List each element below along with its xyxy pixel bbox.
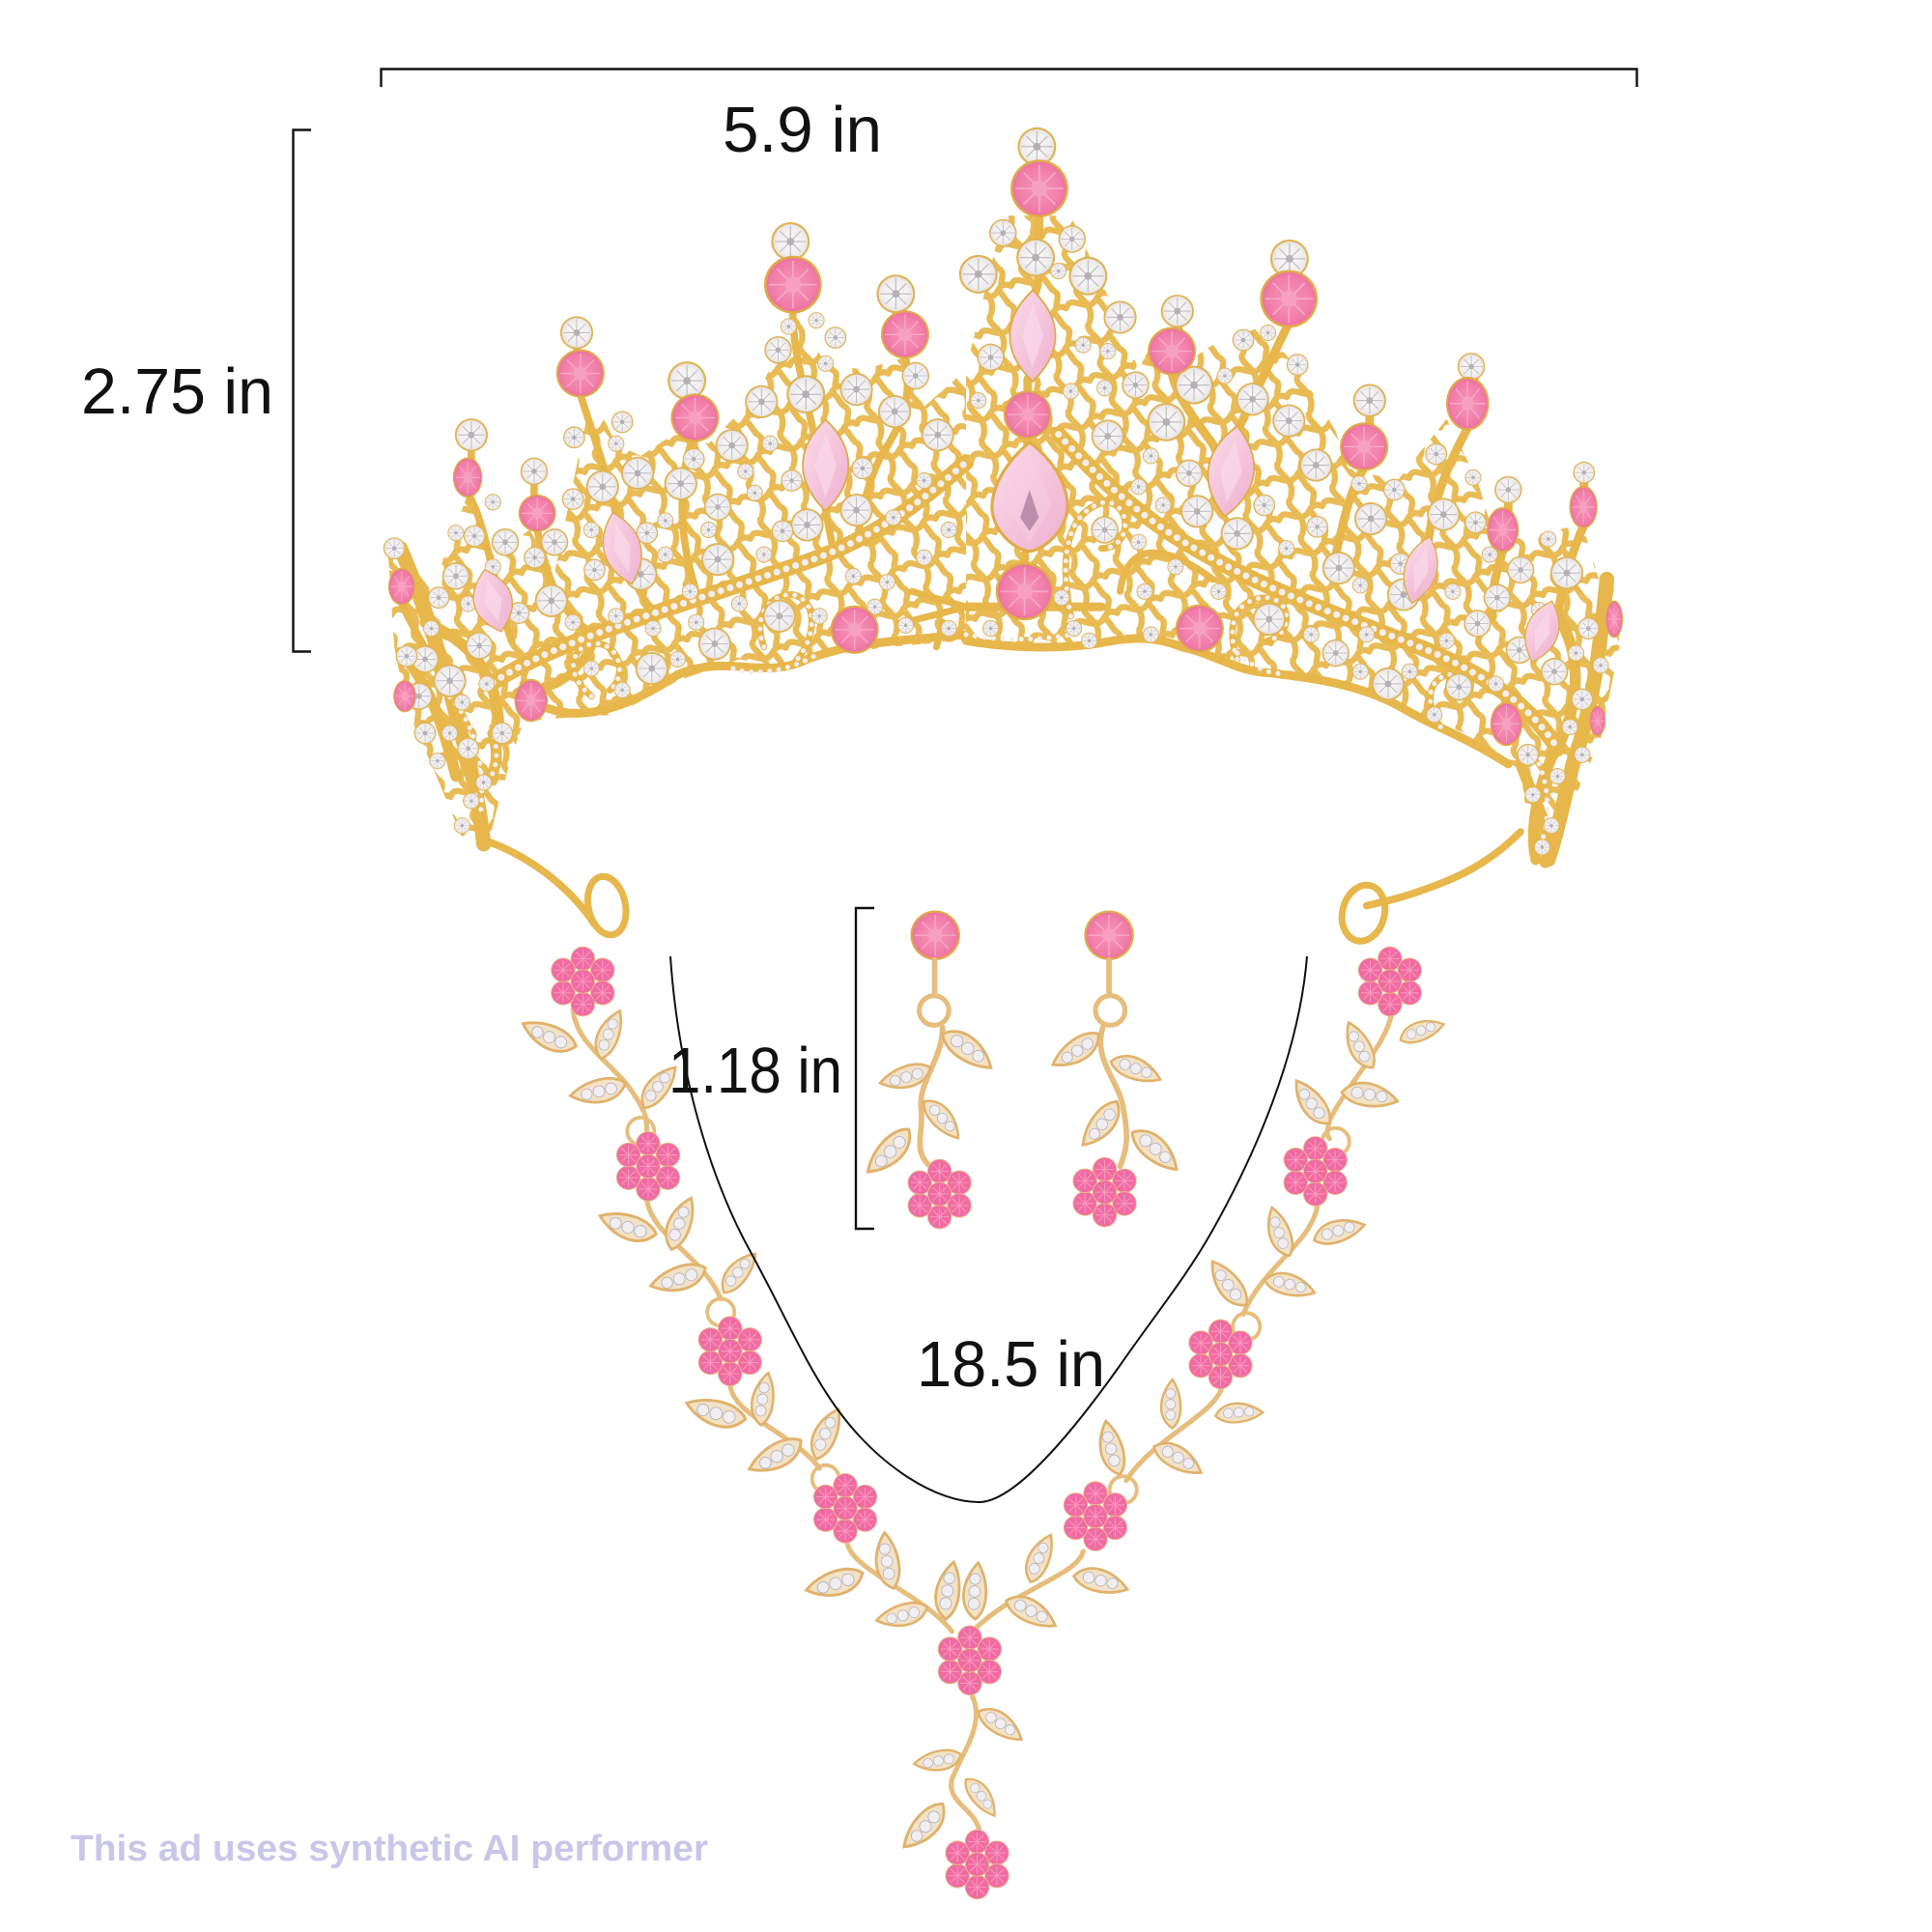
bracket: earring height [856,908,874,1229]
necklace pendant [897,1626,1028,1899]
right earring [1048,910,1185,1227]
label: necklace length 18.5 in: 18.5 in [917,1328,1105,1401]
bracket: crown width [381,70,1636,87]
label: crown width 5.9 in: 5.9 in [723,94,882,166]
right strand of necklace [962,947,1446,1634]
necklace [518,947,1446,1899]
left strand of necklace [518,947,963,1633]
tiara [384,128,1623,946]
watermark note: This ad uses synthetic AI performer [71,1829,708,1869]
right half of tiara [959,128,1623,946]
left earring [861,910,999,1229]
earrings [861,910,1185,1229]
icon: centre teardrop gem [992,442,1067,552]
label: crown height 2.75 in: 2.75 in [81,355,273,428]
curve: necklace length [670,956,1307,1502]
left half of tiara [384,222,966,938]
bracket: crown height [294,129,311,651]
label: earring height 1.18 in: 1.18 in [668,1035,842,1107]
